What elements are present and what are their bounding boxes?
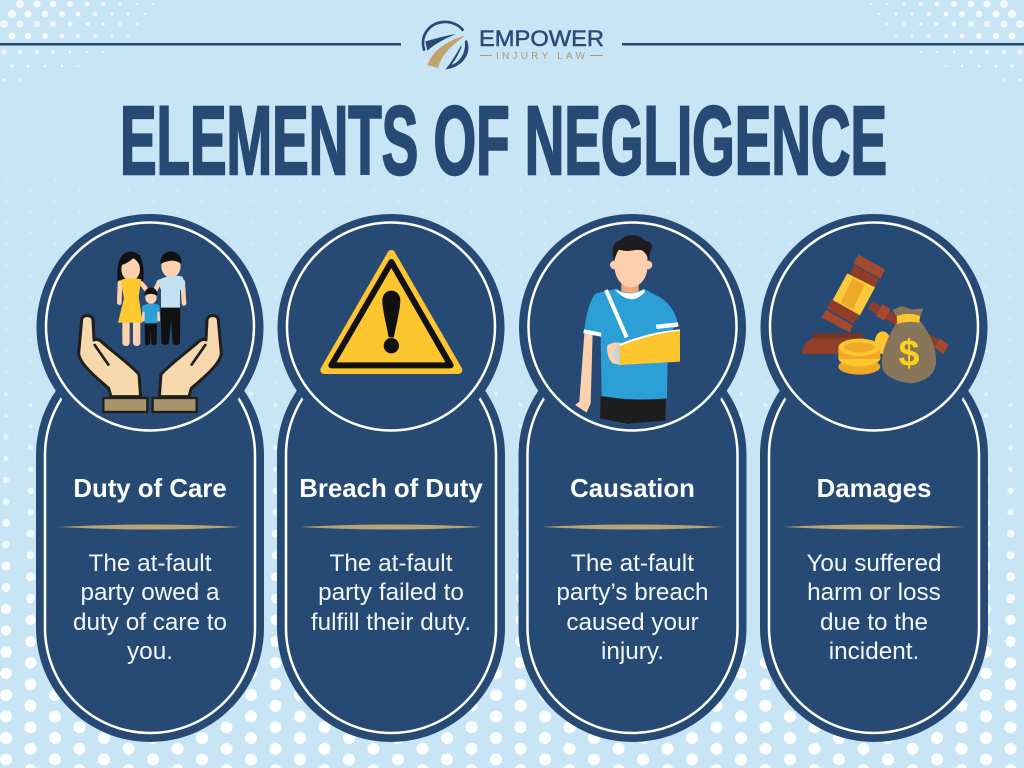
description: party’s breach	[556, 579, 709, 606]
description: party owed a	[80, 579, 220, 606]
description: harm or loss	[807, 579, 941, 606]
description: The at-fault	[89, 550, 212, 577]
description: duty of care to	[73, 609, 227, 636]
heading: Breach of Duty	[299, 475, 483, 503]
logo wordmark: EMPOWER	[479, 26, 604, 51]
card shape	[518, 214, 746, 742]
card shape	[760, 214, 988, 742]
heading: Damages	[817, 475, 931, 503]
divider	[300, 524, 482, 530]
description: you.	[127, 638, 173, 665]
card shape	[277, 214, 505, 742]
icon: warning triangle	[324, 254, 458, 370]
heading: Causation	[570, 475, 695, 503]
header rule left	[0, 43, 401, 46]
logo tagline: INJURY LAW	[496, 51, 586, 62]
logo: Empower Injury Law	[423, 22, 604, 69]
description: incident.	[829, 638, 919, 665]
logo tagline dashes	[480, 54, 603, 56]
description: You suffered	[806, 550, 942, 577]
icon: gavel and money bag: $	[899, 331, 920, 373]
panel: causation	[518, 214, 746, 742]
panel: duty of care	[36, 214, 264, 742]
logo mark	[423, 22, 468, 69]
description: fulfill their duty.	[311, 609, 471, 636]
description: The at-fault	[571, 550, 694, 577]
divider	[783, 524, 965, 530]
card shape	[36, 214, 264, 742]
panel: damages	[760, 214, 988, 742]
description: injury.	[601, 638, 664, 665]
divider	[542, 524, 723, 530]
header rule right	[622, 43, 1024, 46]
description: due to the	[820, 609, 928, 636]
icon: injured man with sling	[575, 235, 680, 424]
panel: breach of duty	[277, 214, 505, 742]
icon: family in hands	[79, 251, 221, 412]
description: caused your	[566, 609, 699, 636]
icon: gavel and money bag	[802, 255, 949, 383]
description: The at-fault	[330, 550, 453, 577]
heading: Duty of Care	[73, 475, 227, 503]
description: party failed to	[318, 579, 464, 606]
divider	[59, 524, 241, 530]
